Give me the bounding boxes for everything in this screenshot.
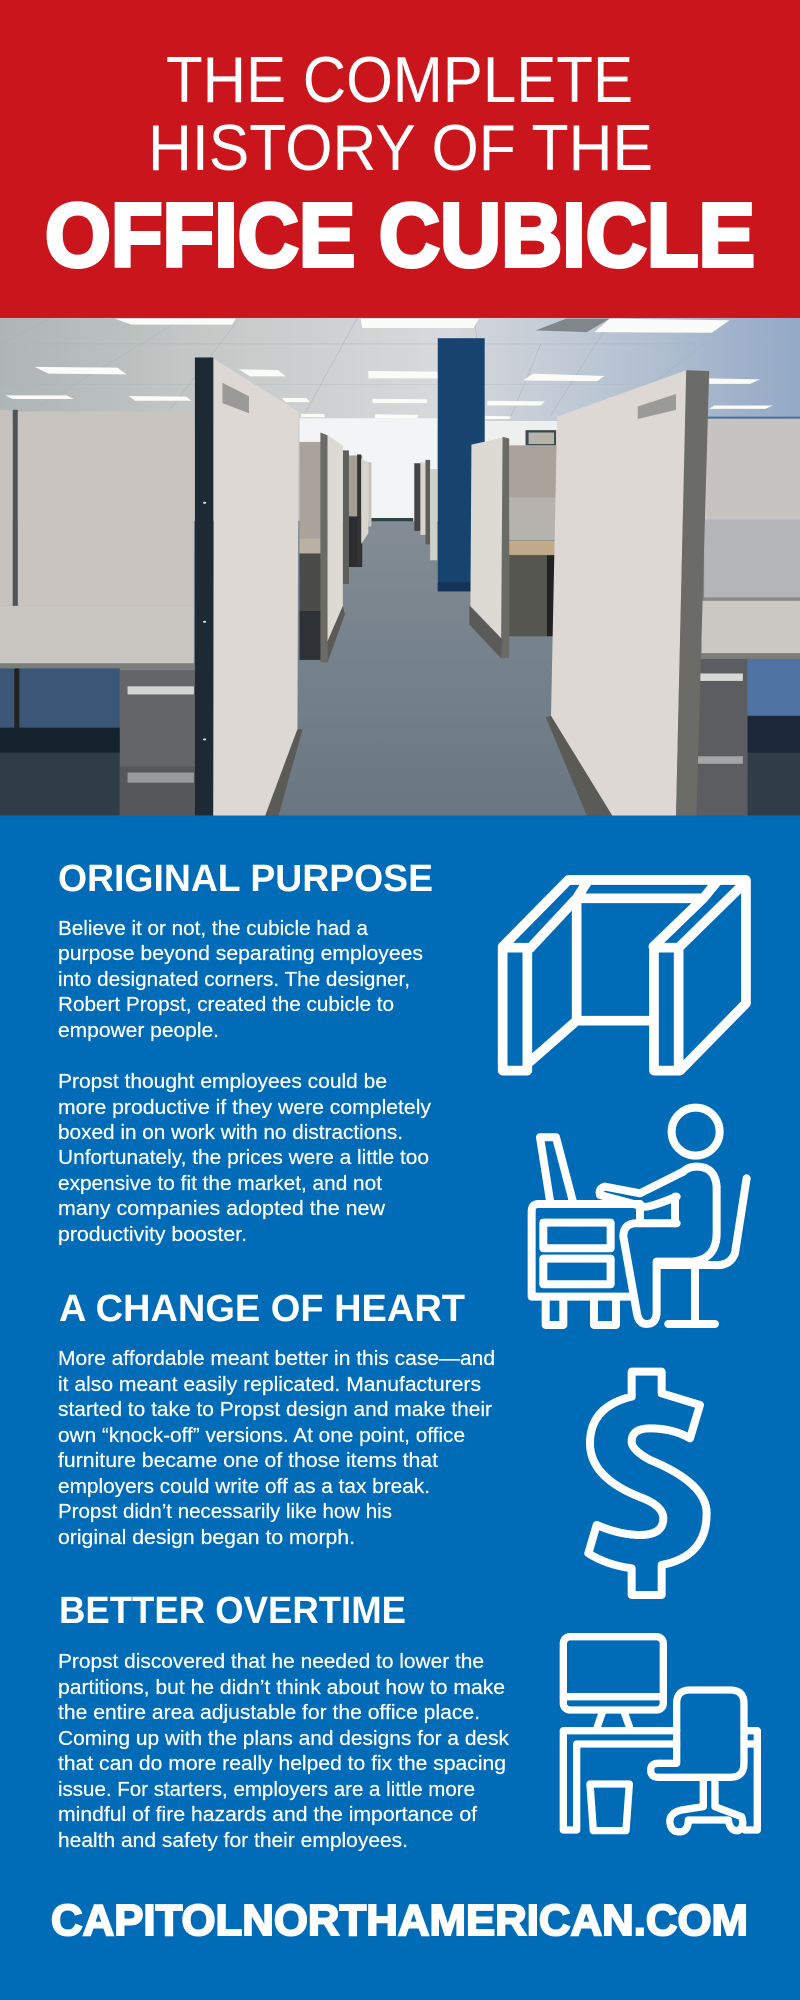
left partition [195, 357, 303, 815]
text block: better overtime: Coming up with the plans and designs for a desk [58, 1727, 510, 1750]
text block: better overtime: health and safety for their employees. [58, 1829, 408, 1852]
blue column [438, 338, 485, 591]
footer: website url: CAPITOLNORTHAMERICAN.COM [51, 1896, 748, 1945]
left workstation [0, 410, 195, 815]
text block: a change of heart [58, 1347, 495, 1549]
text block: a change of heart: furniture became one of those items that [58, 1449, 438, 1472]
text block: better overtime: issue. For starters, employers are a little more [58, 1778, 475, 1801]
text block: a change of heart: started to take to Propst design and make their [58, 1398, 492, 1421]
far left-side cubicles [343, 450, 371, 584]
photo: office cubicles [0, 318, 800, 815]
text block: a change of heart: More affordable meant better in this case—and [58, 1347, 495, 1370]
icon: seated worker [532, 1108, 747, 1325]
text block: a change of heart: employers could write off as a tax break. [58, 1475, 430, 1498]
text block: better overtime: partitions, but he didn’t think about how to make [58, 1676, 505, 1699]
header banner [0, 0, 800, 318]
text block: original purpose intro: Robert Propst, created the cubicle to [58, 993, 394, 1016]
title: HISTORY OF THE [148, 111, 653, 184]
text block: better overtime: the entire area adjustable for the office place. [58, 1701, 480, 1724]
text block: original purpose intro: purpose beyond separating employees [58, 942, 423, 965]
text block: original purpose detail: expensive to fit the market, and not [58, 1172, 382, 1195]
text block: original purpose intro [58, 917, 423, 1042]
icon: dollar sign [588, 1372, 707, 1595]
text block: a change of heart: it also meant easily replicated. Manufacturers [58, 1373, 481, 1396]
text block: original purpose intro: Believe it or not, the cubicle had a [58, 917, 369, 940]
title [45, 43, 755, 286]
text block: better overtime: mindful of fire hazards and the importance of [58, 1803, 477, 1826]
icon: desk and chair [563, 1637, 757, 1832]
right workstation [696, 417, 800, 815]
text block: original purpose detail [58, 1070, 432, 1246]
section: better overtime [58, 1590, 510, 1852]
mid left cubicle [299, 432, 345, 662]
panel: blue content area [0, 816, 800, 2000]
right partition [546, 370, 709, 815]
mid right cubicle [469, 437, 566, 658]
heading: original purpose: ORIGINAL PURPOSE [58, 858, 433, 900]
section: a change of heart [58, 1288, 495, 1549]
ceiling lights [5, 319, 773, 419]
text block: original purpose detail: Propst thought employees could be [58, 1070, 387, 1093]
text block: original purpose intro: into designated corners. The designer, [58, 968, 410, 991]
text block: better overtime [58, 1650, 510, 1852]
title: THE COMPLETE [166, 43, 633, 116]
text block: original purpose detail: Unfortunately, the prices were a little too [58, 1146, 429, 1169]
heading: a change of heart: A CHANGE OF HEART [59, 1288, 465, 1330]
section: original purpose [58, 858, 433, 1246]
text block: a change of heart: original design began to morph. [58, 1526, 355, 1549]
text block: a change of heart: own “knock-off” versions. At one point, office [58, 1424, 465, 1447]
text block: original purpose detail: boxed in on work with no distractions. [58, 1121, 403, 1144]
text block: better overtime: Propst discovered that he needed to lower the [58, 1650, 484, 1673]
text block: original purpose detail: many companies adopted the new [58, 1197, 385, 1220]
text block: original purpose detail: productivity booster. [58, 1223, 247, 1246]
title: OFFICE CUBICLE [45, 186, 755, 286]
text block: a change of heart: Propst didn’t necessarily like how his [58, 1500, 392, 1523]
far right-side cubicles [414, 460, 437, 560]
text block: better overtime: that can do more really helped to fix the spacing [58, 1752, 506, 1775]
text block: original purpose detail: more productive if they were completely [58, 1096, 432, 1119]
heading: better overtime: BETTER OVERTIME [59, 1590, 406, 1632]
icon: cubicle [503, 880, 746, 1071]
text block: original purpose intro: empower people. [58, 1019, 219, 1042]
